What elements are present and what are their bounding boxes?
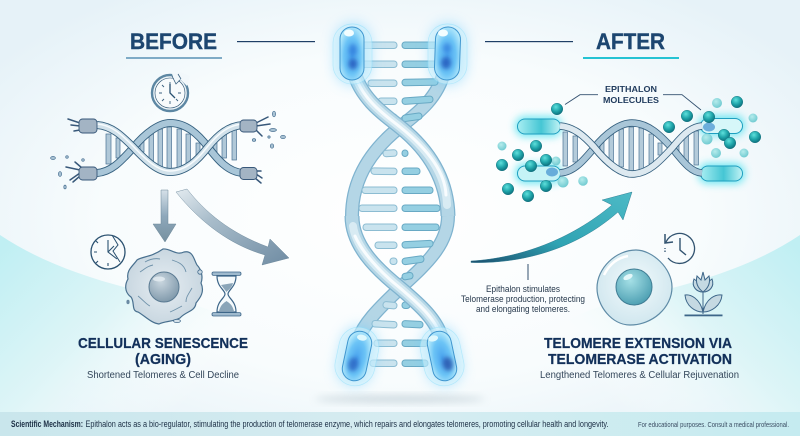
heading: after: AFTER [596, 29, 665, 54]
frayed caps [66, 117, 270, 183]
text: stimulates: Epithalon stimulates [486, 284, 560, 294]
capsule: top left [333, 24, 372, 84]
icon: reversing clock [665, 233, 695, 263]
rungs left [359, 42, 397, 366]
heading: after [583, 29, 679, 59]
title: cellular senescence [78, 335, 248, 381]
title: telomere extension [540, 335, 739, 381]
text: stimulates: and elongating telomeres. [476, 304, 570, 314]
epithalon molecules [496, 96, 761, 202]
pointer line [528, 264, 529, 280]
callout: epithalon molecules: EPITHALON [605, 84, 657, 94]
DNA: extended after [515, 115, 745, 184]
shadow under central DNA [315, 396, 485, 402]
back strands [352, 72, 448, 340]
arrow: before to centre [176, 189, 289, 265]
heading: before: BEFORE [130, 29, 217, 54]
icon: senescent cell [126, 249, 202, 324]
icon: cracked clock left [91, 235, 125, 269]
icon: broken clock top [152, 72, 190, 111]
arrow: down to senescence [153, 190, 176, 242]
capsule: top right [428, 24, 467, 84]
glowing telomere pills [515, 115, 745, 184]
capsule: bottom right [416, 323, 468, 390]
connector line before [237, 41, 315, 42]
connector line after [485, 41, 573, 42]
text: stimulates: Telomerase production, protecting [461, 294, 585, 304]
rungs [563, 127, 698, 171]
strands [560, 123, 702, 174]
DNA: damaged before [51, 111, 285, 189]
strands [97, 123, 243, 173]
capsule: bottom left [331, 323, 383, 390]
title: cellular senescence: Shortened Telomeres & Cell Decline [87, 370, 239, 381]
title: cellular senescence: CELLULAR SENESCENCE [78, 335, 248, 352]
rungs right [402, 42, 442, 366]
central DNA helix [331, 24, 468, 390]
mechanism note: Scientific Mechanism: [11, 419, 83, 429]
title: cellular senescence: (AGING) [135, 351, 191, 368]
front strands [352, 72, 448, 340]
title: telomere extension: TELOMERASE ACTIVATION [548, 351, 732, 368]
icon: plant [685, 272, 722, 316]
title: telomere extension: Lengthened Telomeres & Cellular Rejuvenation [540, 370, 739, 381]
icon: healthy cell [597, 250, 672, 325]
icon: hourglass [212, 272, 241, 316]
rungs [106, 127, 236, 171]
fragments [51, 111, 285, 189]
text: stimulates [461, 284, 585, 314]
callout: epithalon molecules: MOLECULES [603, 95, 659, 105]
arrow: teal rising [471, 192, 632, 263]
title: telomere extension: TELOMERE EXTENSION VIA [544, 335, 732, 352]
footer band [0, 412, 800, 436]
callout: epithalon molecules [565, 84, 701, 110]
mechanism note: Epithalon acts as a bio-regulator, stimulating the production of telomerase enzyme, which repairs and elongates telomeres, promoting cellular health and longevity. [86, 419, 608, 429]
repair sites [546, 168, 558, 176]
